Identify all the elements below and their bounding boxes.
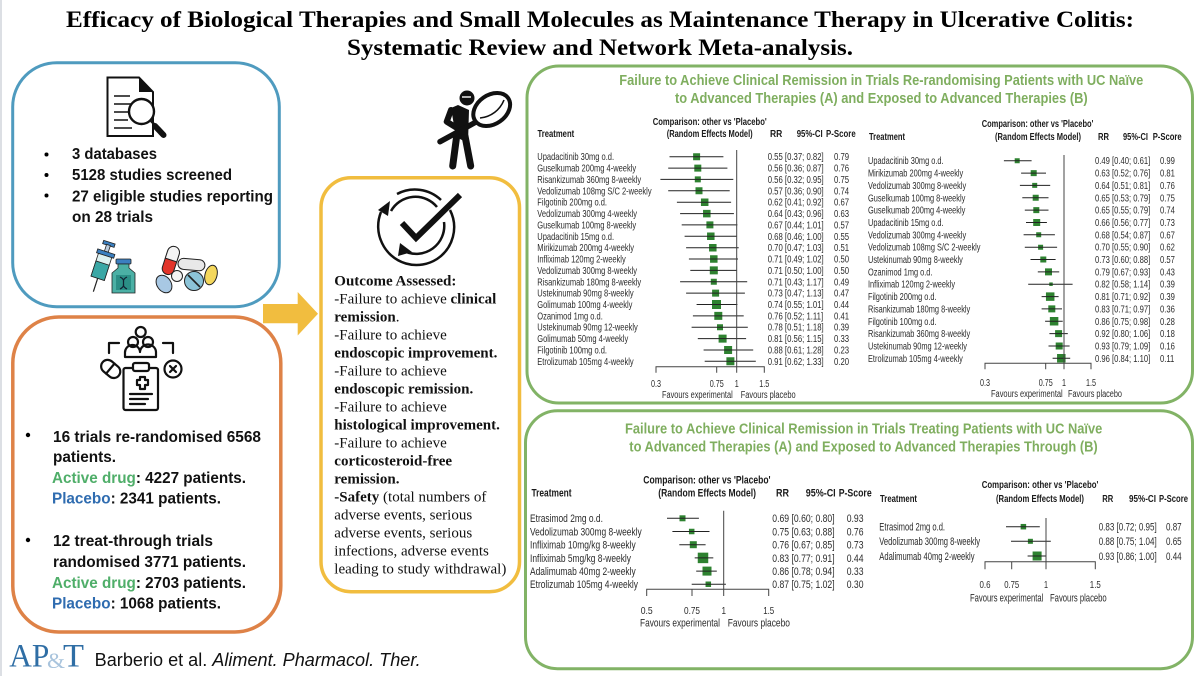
forest plot B: exposed bbox=[868, 119, 1182, 400]
chart D: markers and axis: 1.5 bbox=[1090, 579, 1101, 591]
RR and CI values B: 0.68 [0.54; 0.87] bbox=[1095, 229, 1150, 241]
P-scores A bbox=[834, 151, 849, 367]
P-scores A: 0.33 bbox=[834, 333, 849, 344]
forest plot C: naive: P-Score bbox=[839, 488, 872, 500]
forest plot C: naive: Treatment bbox=[532, 488, 572, 500]
RR and CI values D bbox=[1099, 521, 1157, 563]
title: Systematic Review and Network Meta-analysis. bbox=[347, 35, 853, 60]
treatment labels B: Upadacitinib 15mg o.d. bbox=[868, 217, 944, 228]
P-scores B: 0.67 bbox=[1160, 229, 1175, 241]
RR and CI values C: 0.86 [0.78; 0.94] bbox=[772, 566, 835, 578]
forest plot B: exposed: 95%-CI bbox=[1123, 132, 1148, 143]
treatment labels C: Vedolizumab 300mg 8-weekly bbox=[530, 526, 642, 539]
search list: on 28 trials bbox=[72, 209, 153, 226]
RR and CI values B: 0.81 [0.71; 0.92] bbox=[1095, 291, 1150, 302]
heading: re-randomised trials: to Advanced Therapies (A) and Exposed to Advanced Therapies (B) bbox=[675, 91, 1088, 107]
treatment labels B: Upadacitinib 30mg o.d. bbox=[868, 155, 944, 166]
panel: treat-through trials bbox=[526, 411, 1192, 669]
P-scores B: 0.18 bbox=[1160, 328, 1175, 339]
outcomes text: histological improvement. bbox=[334, 418, 500, 434]
RR and CI values B: 0.70 [0.55; 0.90] bbox=[1095, 242, 1150, 253]
treatment labels A: Etrolizumab 105mg 4-weekly bbox=[537, 356, 634, 367]
chart D: markers and axis: Favours placebo bbox=[1050, 593, 1107, 605]
trials list: patients. bbox=[53, 449, 116, 466]
trials list: 16 trials re-randomised 6568 bbox=[53, 429, 261, 446]
icon: person with magnifying glass bbox=[440, 86, 516, 166]
panel: re-randomised trials bbox=[527, 66, 1192, 403]
RR and CI values B: 0.83 [0.71; 0.97] bbox=[1095, 303, 1150, 315]
P-scores A: 0.50 bbox=[834, 254, 849, 265]
P-scores B: 0.39 bbox=[1160, 291, 1175, 302]
P-scores C: 0.73 bbox=[847, 540, 864, 552]
RR and CI values C: 0.83 [0.77; 0.91] bbox=[772, 553, 835, 565]
forest plot D: exposed: Comparison: other vs 'Placebo' bbox=[982, 480, 1098, 491]
trials list: Placebo: 2341 patients. bbox=[52, 490, 221, 508]
RR and CI values A: 0.71 [0.49; 1.02] bbox=[768, 254, 824, 265]
RR and CI values A: 0.62 [0.41; 0.92] bbox=[768, 197, 824, 208]
P-scores A: 0.20 bbox=[834, 356, 849, 367]
logo: AP&T bbox=[9, 639, 84, 675]
outcomes text: adverse events, serious bbox=[334, 508, 472, 524]
P-scores A: 0.57 bbox=[834, 219, 849, 231]
P-scores D: 0.87 bbox=[1166, 521, 1182, 534]
chart A: markers and axis: 1 bbox=[735, 378, 739, 390]
P-scores A: 0.41 bbox=[834, 310, 849, 322]
P-scores B: 0.39 bbox=[1160, 279, 1175, 290]
P-scores A: 0.75 bbox=[834, 174, 849, 185]
P-scores A: 0.23 bbox=[834, 345, 849, 356]
panel: search strategy bbox=[13, 63, 279, 307]
trials list: 12 treat-through trials bbox=[53, 533, 213, 550]
treatment labels B: Filgotinib 200mg o.d. bbox=[868, 291, 937, 302]
RR and CI values D: 0.83 [0.72; 0.95] bbox=[1099, 521, 1157, 534]
chart D: markers and axis: Favours experimental bbox=[970, 593, 1043, 605]
RR and CI values A: 0.78 [0.51; 1.18] bbox=[768, 322, 824, 333]
chart A: markers and axis: Favours placebo bbox=[741, 390, 796, 401]
forest plot D: exposed: P-Score bbox=[1159, 494, 1188, 505]
heading: re-randomised trials bbox=[619, 73, 1143, 107]
treatment labels D: Adalimumab 40mg 2-weekly bbox=[879, 551, 975, 563]
outcomes text: infections, adverse events bbox=[334, 544, 489, 560]
P-scores A: 0.79 bbox=[834, 151, 849, 162]
heading: treat-through trials: to Advanced Therapies (A) and Exposed to Advanced Therapies Through (B) bbox=[629, 440, 1098, 456]
treatment labels A: Golimumab 50mg 4-weekly bbox=[537, 333, 629, 344]
treatment labels A: Filgotinib 200mg o.d. bbox=[537, 197, 607, 208]
RR and CI values A: 0.88 [0.61; 1.28] bbox=[768, 345, 824, 356]
RR and CI values B: 0.86 [0.75; 0.98] bbox=[1095, 316, 1150, 327]
outcomes text bbox=[334, 274, 506, 578]
forest plot B: exposed: Treatment bbox=[869, 132, 906, 143]
chart B: markers and axis: 0.75 bbox=[1039, 377, 1053, 389]
forest plot D: exposed bbox=[879, 480, 1188, 605]
treatment labels B bbox=[868, 155, 981, 364]
treatment labels B: Risankizumab 360mg 8-weekly bbox=[868, 328, 971, 339]
forest plot A: naive: RR bbox=[770, 129, 783, 140]
RR and CI values D: 0.93 [0.86; 1.00] bbox=[1099, 551, 1157, 563]
forest plot C: naive: 95%-CI bbox=[806, 488, 836, 500]
P-scores A: 0.44 bbox=[834, 299, 849, 310]
RR and CI values A: 0.64 [0.43; 0.96] bbox=[768, 208, 824, 219]
P-scores B: 0.75 bbox=[1160, 192, 1175, 204]
forest plot A: naive: Comparison: other vs 'Placebo' bbox=[653, 117, 767, 128]
RR and CI values B: 0.79 [0.67; 0.93] bbox=[1095, 266, 1150, 278]
outcomes text: endoscopic improvement. bbox=[334, 346, 498, 362]
P-scores B: 0.99 bbox=[1160, 155, 1175, 166]
panel: outcomes bbox=[321, 178, 520, 592]
forest plot A: naive: P-Score bbox=[826, 129, 856, 140]
treatment labels A: Vedolizumab 300mg 4-weekly bbox=[537, 208, 637, 219]
treatment labels C: Adalimumab 40mg 2-weekly bbox=[530, 566, 636, 578]
RR and CI values A: 0.68 [0.46; 1.00] bbox=[768, 231, 824, 242]
treatment labels B: Vedolizumab 108mg S/C 2-weekly bbox=[868, 242, 981, 253]
heading: treat-through trials bbox=[625, 422, 1102, 456]
chart B: markers and axis: 0.3 bbox=[980, 377, 990, 389]
treatment labels A: Vedolizumab 108mg S/C 2-weekly bbox=[537, 185, 652, 197]
forest plot D: exposed: Treatment bbox=[880, 494, 918, 505]
P-scores B: 0.28 bbox=[1160, 316, 1175, 327]
heading: re-randomised trials: Failure to Achieve Clinical Remission in Trials Re-randomising Patients with UC Naïve bbox=[619, 73, 1143, 89]
forest plot C: naive: (Random Effects Model) bbox=[658, 488, 756, 500]
RR and CI values A: 0.74 [0.55; 1.01] bbox=[768, 299, 824, 310]
citation: Barberio et al. Aliment. Pharmacol. Ther. bbox=[95, 650, 421, 670]
forest plot B: exposed: RR bbox=[1098, 132, 1110, 143]
forest plot A: naive: (Random Effects Model) bbox=[667, 129, 753, 140]
search list: 27 eligible studies reporting bbox=[72, 188, 273, 206]
forest plot B: exposed: P-Score bbox=[1153, 132, 1182, 143]
outcomes text: endoscopic remission. bbox=[334, 382, 473, 398]
RR and CI values A: 0.56 [0.32; 0.95] bbox=[768, 174, 824, 185]
forest plot A: naive: 95%-CI bbox=[797, 129, 823, 140]
treatment labels D bbox=[879, 521, 980, 563]
P-scores B: 0.73 bbox=[1160, 217, 1175, 228]
trials list: randomised 3771 patients. bbox=[53, 554, 246, 571]
trials list: Active drug: 4227 patients. bbox=[52, 470, 246, 487]
chart A: markers and axis: 0.3 bbox=[651, 378, 661, 390]
chart A: markers and axis: Favours experimental bbox=[662, 390, 733, 401]
treatment labels A: Filgotinib 100mg o.d. bbox=[537, 344, 607, 356]
P-scores B: 0.81 bbox=[1160, 168, 1175, 179]
treatment labels A: Upadacitinib 15mg o.d. bbox=[537, 231, 614, 242]
icon: document with magnifier bbox=[108, 78, 164, 136]
chart D: markers and axis: 0.75 bbox=[1004, 579, 1019, 591]
chart B: markers and axis: 1 bbox=[1062, 377, 1066, 389]
RR and CI values A: 0.57 [0.36; 0.90] bbox=[768, 185, 824, 197]
P-scores C: 0.30 bbox=[847, 579, 864, 592]
forest plot B: exposed: (Random Effects Model) bbox=[995, 132, 1081, 143]
RR and CI values B: 0.82 [0.58; 1.14] bbox=[1095, 279, 1150, 290]
treatment labels A: Ozanimod 1mg o.d. bbox=[537, 310, 603, 322]
P-scores D bbox=[1166, 521, 1182, 563]
P-scores A: 0.67 bbox=[834, 197, 849, 208]
RR and CI values A bbox=[768, 151, 824, 367]
forest plot A: naive: Treatment bbox=[538, 129, 575, 140]
treatment labels A: Infliximab 120mg 2-weekly bbox=[537, 253, 626, 265]
heading: treat-through trials: Failure to Achieve Clinical Remission in Trials Treating Patients with UC Naïve bbox=[625, 422, 1102, 438]
chart C: markers and axis bbox=[640, 511, 790, 630]
P-scores B: 0.76 bbox=[1160, 180, 1175, 191]
P-scores C: 0.44 bbox=[847, 553, 864, 565]
outcomes text: corticosteroid-free bbox=[334, 454, 452, 470]
outcomes text: -Failure to achieve bbox=[334, 328, 447, 344]
RR and CI values A: 0.91 [0.62; 1.33] bbox=[768, 356, 824, 367]
treatment labels C: Etrolizumab 105mg 4-weekly bbox=[530, 579, 638, 592]
outcomes text: -Failure to achieve bbox=[334, 364, 447, 380]
P-scores B: 0.16 bbox=[1160, 341, 1175, 352]
treatment labels A: Risankizumab 180mg 8-weekly bbox=[537, 276, 642, 288]
P-scores A: 0.63 bbox=[834, 208, 849, 219]
icon: circular check mark bbox=[378, 190, 460, 265]
search list: 3 databases bbox=[72, 146, 157, 163]
icon: patients and clipboard bbox=[98, 327, 182, 410]
P-scores A: 0.74 bbox=[834, 185, 849, 197]
treatment labels C bbox=[530, 513, 642, 592]
forest plot D: exposed: 95%-CI bbox=[1129, 494, 1156, 505]
RR and CI values C: 0.87 [0.75; 1.02] bbox=[772, 579, 835, 592]
title: Efficacy of Biological Therapies and Small Molecules as Maintenance Therapy in Ulcerative Colitis: bbox=[66, 7, 1134, 32]
RR and CI values A: 0.73 [0.47; 1.13] bbox=[768, 288, 824, 299]
treatment labels C: Etrasimod 2mg o.d. bbox=[530, 513, 603, 526]
P-scores B: 0.57 bbox=[1160, 254, 1175, 265]
treatment labels A: Upadacitinib 30mg o.d. bbox=[537, 151, 614, 162]
chart B: markers and axis: Favours placebo bbox=[1068, 389, 1122, 400]
RR and CI values B: 0.65 [0.53; 0.79] bbox=[1095, 192, 1150, 204]
P-scores C: 0.33 bbox=[847, 566, 864, 578]
P-scores D: 0.65 bbox=[1166, 536, 1182, 549]
P-scores A: 0.55 bbox=[834, 231, 849, 242]
treatment labels B: Mirikizumab 200mg 4-weekly bbox=[868, 168, 964, 179]
treatment labels B: Vedolizumab 300mg 4-weekly bbox=[868, 229, 967, 241]
P-scores B bbox=[1160, 155, 1175, 364]
forest plot C: naive: RR bbox=[776, 488, 789, 500]
chart C: markers and axis: 0.5 bbox=[641, 605, 653, 617]
RR and CI values B: 0.65 [0.55; 0.79] bbox=[1095, 205, 1150, 216]
outcomes text: -Failure to achieve bbox=[334, 436, 447, 452]
search list bbox=[44, 146, 273, 226]
RR and CI values B: 0.64 [0.51; 0.81] bbox=[1095, 180, 1150, 191]
P-scores B: 0.11 bbox=[1160, 353, 1174, 364]
chart A: markers and axis bbox=[651, 150, 796, 401]
treatment labels C: Infliximab 5mg/kg 8-weekly bbox=[530, 553, 631, 565]
P-scores A: 0.47 bbox=[834, 288, 849, 299]
outcomes text: remission. bbox=[334, 310, 399, 326]
panel: trials bbox=[13, 317, 281, 632]
treatment labels B: Infliximab 120mg 2-weekly bbox=[868, 279, 956, 290]
P-scores A: 0.51 bbox=[834, 242, 849, 253]
P-scores A: 0.76 bbox=[834, 163, 849, 174]
chart B: markers and axis bbox=[980, 155, 1122, 400]
treatment labels B: Filgotinib 100mg o.d. bbox=[868, 316, 937, 327]
chart D: markers and axis: 1 bbox=[1044, 579, 1048, 591]
forest plot A: naive bbox=[537, 117, 856, 401]
treatment labels B: Guselkumab 200mg 4-weekly bbox=[868, 205, 966, 216]
treatment labels B: Risankizumab 180mg 8-weekly bbox=[868, 303, 971, 315]
RR and CI values B: 0.49 [0.40; 0.61] bbox=[1095, 155, 1150, 166]
treatment labels B: Vedolizumab 300mg 8-weekly bbox=[868, 180, 967, 191]
outcomes text: -Failure to achieve clinical bbox=[334, 292, 496, 308]
chart C: markers and axis: Favours placebo bbox=[728, 618, 790, 630]
treatment labels A: Risankizumab 360mg 8-weekly bbox=[537, 174, 642, 185]
icon: pills bbox=[153, 245, 219, 296]
treatment labels B: Ustekinumab 90mg 12-weekly bbox=[868, 340, 967, 352]
treatment labels A bbox=[537, 151, 652, 367]
P-scores C: 0.93 bbox=[847, 513, 864, 526]
P-scores A: 0.50 bbox=[834, 265, 849, 276]
outcomes text: -Failure to achieve bbox=[334, 400, 447, 416]
chart A: markers and axis: 1.5 bbox=[759, 378, 769, 390]
treatment labels B: Guselkumab 100mg 8-weekly bbox=[868, 192, 966, 204]
RR and CI values C: 0.76 [0.67; 0.85] bbox=[772, 540, 835, 552]
outcomes text: adverse events, serious bbox=[334, 526, 472, 542]
RR and CI values C: 0.69 [0.60; 0.80] bbox=[772, 513, 835, 526]
RR and CI values B: 0.96 [0.84; 1.10] bbox=[1095, 353, 1150, 364]
logo: AP&T: & bbox=[47, 648, 65, 673]
RR and CI values B: 0.73 [0.60; 0.88] bbox=[1095, 254, 1150, 265]
chart C: markers and axis: 1.5 bbox=[763, 605, 774, 617]
outcomes text: -Safety (total numbers of bbox=[334, 490, 486, 506]
RR and CI values B: 0.63 [0.52; 0.76] bbox=[1095, 168, 1150, 179]
treatment labels A: Guselkumab 200mg 4-weekly bbox=[537, 163, 637, 174]
P-scores A: 0.39 bbox=[834, 322, 849, 333]
trials list: Placebo: 1068 patients. bbox=[52, 596, 221, 612]
treatment labels C: Infliximab 10mg/kg 8-weekly bbox=[530, 540, 636, 552]
treatment labels B: Etrolizumab 105mg 4-weekly bbox=[868, 353, 963, 364]
RR and CI values B: 0.66 [0.56; 0.77] bbox=[1095, 217, 1150, 228]
outcomes text: Outcome Assessed: bbox=[334, 274, 456, 290]
chart B: markers and axis: 1.5 bbox=[1086, 377, 1096, 389]
trials list bbox=[26, 429, 261, 612]
RR and CI values A: 0.71 [0.43; 1.17] bbox=[768, 276, 824, 288]
RR and CI values A: 0.56 [0.36; 0.87] bbox=[768, 163, 824, 174]
P-scores B: 0.62 bbox=[1160, 242, 1175, 253]
P-scores B: 0.36 bbox=[1160, 303, 1175, 315]
outcomes text: remission. bbox=[334, 472, 400, 488]
RR and CI values C bbox=[772, 513, 835, 592]
RR and CI values B: 0.93 [0.79; 1.09] bbox=[1095, 341, 1150, 352]
chart B: markers and axis: Favours experimental bbox=[991, 389, 1063, 400]
P-scores A: 0.49 bbox=[834, 276, 849, 288]
treatment labels D: Etrasimod 2mg o.d. bbox=[879, 521, 945, 534]
P-scores B: 0.74 bbox=[1160, 205, 1175, 216]
P-scores B: 0.43 bbox=[1160, 266, 1175, 278]
treatment labels A: Guselkumab 100mg 8-weekly bbox=[537, 219, 637, 231]
chart C: markers and axis: Favours experimental bbox=[640, 618, 720, 630]
search list: 5128 studies screened bbox=[72, 167, 232, 184]
chart D: markers and axis bbox=[970, 518, 1107, 605]
P-scores D: 0.44 bbox=[1166, 551, 1182, 563]
RR and CI values B bbox=[1095, 155, 1150, 364]
arrow bbox=[263, 292, 318, 336]
RR and CI values B: 0.92 [0.80; 1.06] bbox=[1095, 328, 1150, 339]
RR and CI values A: 0.67 [0.44; 1.01] bbox=[768, 219, 824, 231]
icon: syringe and vial bbox=[85, 239, 135, 294]
RR and CI values C: 0.75 [0.63; 0.88] bbox=[772, 527, 835, 539]
treatment labels D: Vedolizumab 300mg 8-weekly bbox=[879, 536, 980, 549]
forest plot D: exposed: (Random Effects Model) bbox=[996, 494, 1084, 505]
logo: AP&T: T bbox=[63, 639, 84, 675]
RR and CI values A: 0.76 [0.52; 1.11] bbox=[768, 310, 823, 322]
forest plot C: naive bbox=[530, 474, 872, 630]
treatment labels A: Ustekinumab 90mg 12-weekly bbox=[537, 322, 638, 333]
P-scores C: 0.76 bbox=[847, 527, 864, 539]
chart C: markers and axis: 1 bbox=[721, 605, 726, 617]
chart D: markers and axis: 0.6 bbox=[980, 579, 991, 591]
RR and CI values A: 0.71 [0.50; 1.00] bbox=[768, 265, 824, 276]
forest plot D: exposed: RR bbox=[1102, 494, 1114, 505]
title bbox=[66, 7, 1134, 60]
P-scores C bbox=[847, 513, 864, 592]
treatment labels A: Mirikizumab 200mg 4-weekly bbox=[537, 242, 635, 253]
treatment labels A: Golimumab 100mg 4-weekly bbox=[537, 299, 633, 310]
RR and CI values A: 0.55 [0.37; 0.82] bbox=[768, 151, 824, 162]
treatment labels A: Vedolizumab 300mg 8-weekly bbox=[537, 265, 637, 276]
trials list: Active drug: 2703 patients. bbox=[52, 575, 246, 592]
treatment labels B: Ozanimod 1mg o.d. bbox=[868, 266, 932, 278]
RR and CI values D: 0.88 [0.75; 1.04] bbox=[1099, 536, 1157, 549]
forest plot B: exposed: Comparison: other vs 'Placebo' bbox=[982, 119, 1093, 130]
RR and CI values A: 0.70 [0.47; 1.03] bbox=[768, 242, 824, 253]
outcomes text: leading to study withdrawal) bbox=[334, 562, 506, 578]
forest plot C: naive: Comparison: other vs 'Placebo' bbox=[643, 474, 771, 486]
chart C: markers and axis: 0.75 bbox=[684, 605, 700, 617]
chart A: markers and axis: 0.75 bbox=[710, 378, 724, 390]
treatment labels A: Ustekinumab 90mg 8-weekly bbox=[537, 288, 634, 299]
treatment labels B: Ustekinumab 90mg 8-weekly bbox=[868, 254, 963, 265]
RR and CI values A: 0.81 [0.56; 1.15] bbox=[768, 333, 824, 344]
logo: AP&T: AP bbox=[9, 639, 49, 675]
